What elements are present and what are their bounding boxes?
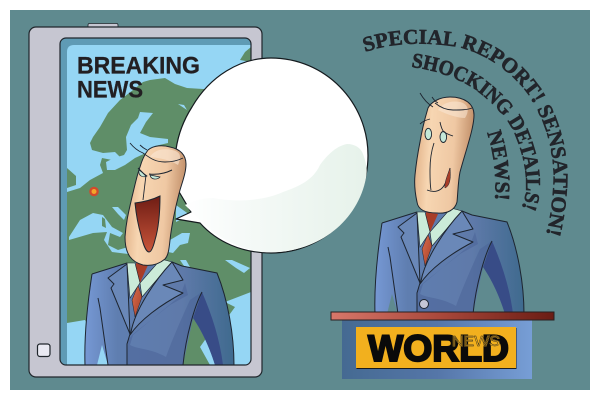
heading: breaking news: NEWS	[77, 76, 143, 104]
world news sign: NEWS	[452, 333, 500, 350]
reporter suit	[375, 208, 524, 314]
speech bubble	[175, 58, 368, 253]
reporter eyes	[425, 128, 432, 140]
angry eyes	[139, 170, 160, 179]
heading: breaking news	[78, 56, 199, 98]
world news sign: WORLD	[368, 328, 509, 369]
reporter nose and smile	[427, 143, 450, 191]
monitor button	[38, 344, 50, 356]
open mouth	[135, 196, 160, 252]
shouting anchor suit	[85, 259, 234, 365]
heading: breaking news: BREAKING	[77, 52, 200, 80]
special report curved text: SHOCKING DETAILS!	[412, 54, 540, 211]
map of Europe	[67, 47, 251, 365]
screen with map	[60, 38, 251, 365]
monitor frame	[29, 24, 262, 377]
suit button	[420, 300, 428, 308]
world news sign: NEWS	[452, 333, 500, 350]
special report curved text: NEWS!	[486, 128, 510, 200]
reporter at desk	[375, 93, 524, 314]
news desk	[331, 312, 554, 379]
reporter head	[415, 93, 474, 213]
shouting anchor head	[125, 143, 186, 265]
hair	[130, 143, 183, 162]
location marker	[89, 187, 99, 196]
special report curved text: SPECIAL REPORT! SENSATION!	[362, 30, 568, 236]
